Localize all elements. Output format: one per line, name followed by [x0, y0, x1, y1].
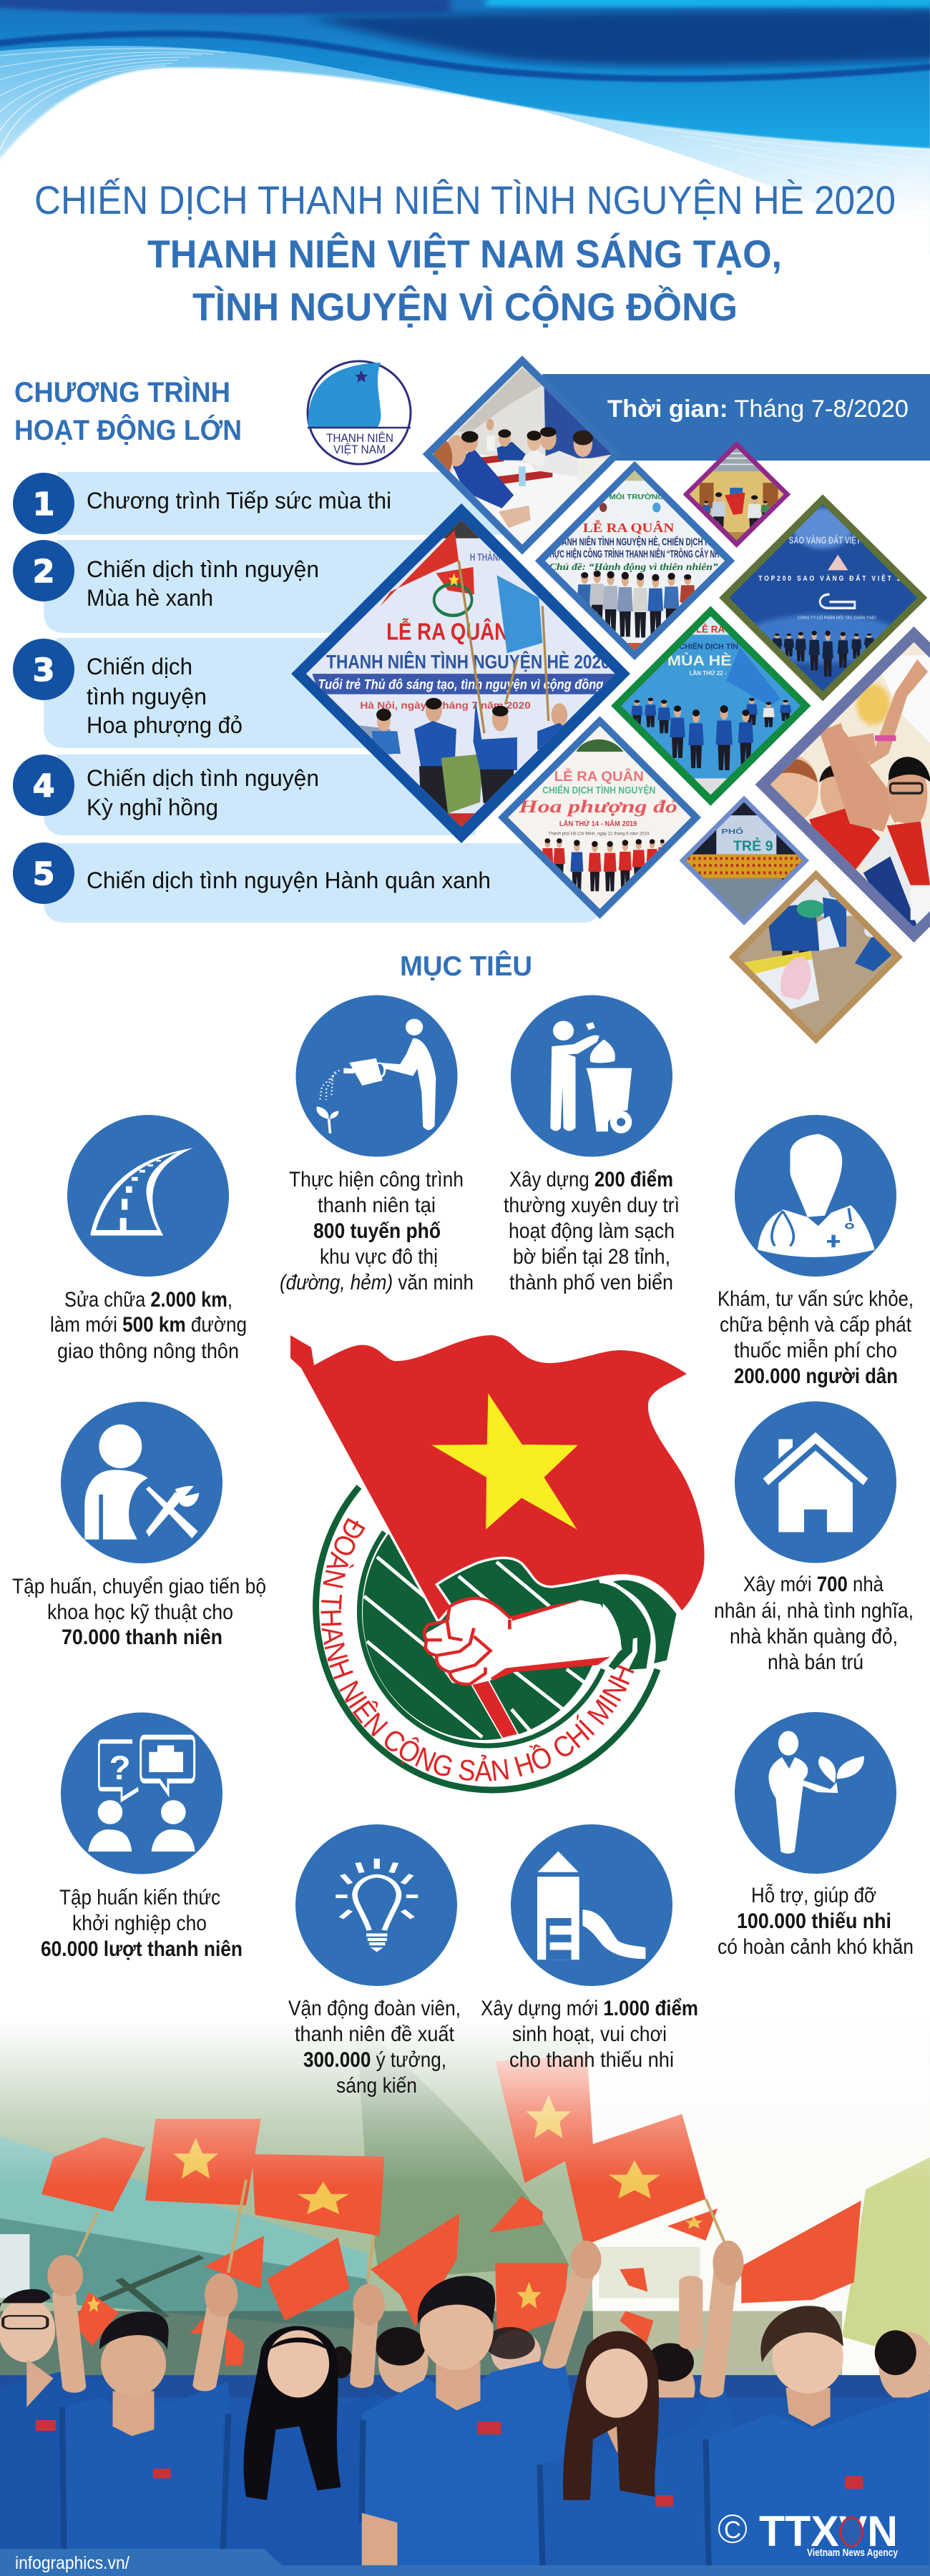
text: sinh hoạt, vui chơi [512, 2022, 667, 2046]
text: Xây dựng mới 1.000 điểm [481, 1997, 698, 2020]
text: thanh niên tại [318, 1194, 436, 1217]
row 3: tình nguyện [87, 684, 207, 709]
text [50, 1288, 247, 1363]
icon: doctor [758, 1134, 875, 1257]
text: Hỗ trợ, giúp đỡ [751, 1884, 876, 1907]
background: blue wave header [0, 0, 930, 255]
icon: Thanh nien Viet Nam logo: VIỆT NAM [333, 443, 386, 456]
row 1 [13, 472, 522, 535]
flags [41, 2055, 861, 2366]
hand and sleeve [424, 1580, 676, 1738]
objective: bins [504, 996, 680, 1294]
heading: programme: CHƯƠNG TRÌNH [14, 376, 230, 408]
photo: main, Le ra quan: Tuổi trẻ Thủ đô sáng tạo, tình nguyện vì cộng đồng [318, 677, 603, 692]
agency logo: TTXVN: C [724, 2517, 741, 2544]
photo: environment launch [535, 461, 735, 660]
photo: main, Le ra quan: LỄ RA QUÂN [386, 617, 509, 645]
raised arms [64, 2263, 727, 2391]
heading: programme: HOẠT ĐỘNG LỚN [14, 413, 242, 446]
icon: person watering plant [316, 1019, 436, 1134]
icon: man holding a plant [768, 1731, 864, 1854]
photo: Top 200 Sao Vang Dat Viet: TOP200 SAO VÀNG ĐẤT VIỆT 2 [758, 574, 901, 583]
row 5 [13, 842, 601, 923]
text: Thực hiện công trình [289, 1168, 464, 1191]
icon: two people talking [88, 1737, 195, 1852]
agency logo: TTXVN: TTXVN [759, 2507, 898, 2555]
objective: ideas [288, 1824, 461, 2098]
row 2: 2 [33, 554, 54, 590]
emblem: Doan TNCS Ho Chi Minh [290, 1335, 705, 1794]
text: 800 tuyến phố [313, 1219, 441, 1243]
text [12, 1575, 266, 1649]
icon: house [763, 1432, 868, 1532]
text: thường xuyên duy trì [504, 1194, 680, 1217]
text [718, 1884, 914, 1959]
icon: Thanh nien Viet Nam logo [308, 361, 411, 464]
row 2: Chiến dịch tình nguyện [87, 556, 319, 582]
text: làm mới 500 km đường [50, 1313, 247, 1337]
circular text: ĐOÀN THANH NIÊN CỘNG SẢN HỒ CHÍ MINH [320, 1518, 634, 1781]
footer: source bar: infographics.vn/ [15, 2553, 129, 2573]
icon: light bulb [336, 1859, 418, 1952]
objective: houses [714, 1402, 914, 1674]
objective: playgrounds [481, 1824, 698, 2072]
row 3: Chiến dịch [87, 654, 192, 679]
back row [0, 2375, 930, 2414]
text: hoạt động làm sạch [509, 1219, 675, 1243]
photo: Hoa phuong do [498, 716, 701, 919]
photo: Hoa phuong do: Hoa phượng đỏ [518, 797, 677, 817]
text: 60.000 lượt thanh niên [41, 1937, 243, 1961]
text: Xây dựng 200 điểm [509, 1168, 673, 1191]
photo: environment launch: THANH NIÊN TÌNH NGUYỆN HÈ, CHIẾN DỊCH KỲ [552, 536, 715, 548]
text: Vận động đoàn viên, [288, 1997, 461, 2020]
heading: objectives: MỤC TIÊU [400, 950, 532, 982]
footer: source bar [0, 2549, 930, 2576]
icon: two people talking: ? [109, 1749, 131, 1786]
text: thành phố ven biển [509, 1271, 673, 1294]
row 4: Chiến dịch tình nguyện [87, 765, 319, 791]
text: khu vực đô thị [320, 1245, 438, 1269]
text [718, 1287, 914, 1388]
photo: main, Le ra quan: Hà Nội, ngày 1 tháng 7 năm 2020 [360, 700, 531, 711]
photo: Mua he xanh: CHIẾN DỊCH TÌN [679, 641, 738, 652]
photo: main, Le ra quan: H THÀNH [470, 551, 504, 563]
text: khởi nghiệp cho [72, 1912, 207, 1935]
panel: programme list [13, 472, 601, 923]
text: Tập huấn, chuyển giao tiến bộ [12, 1575, 266, 1598]
text [41, 1886, 243, 1961]
text [280, 1168, 474, 1294]
row 3: Hoa phượng đỏ [87, 712, 243, 738]
row 5: Chiến dịch tình nguyện Hành quân xanh [87, 867, 491, 893]
text [714, 1573, 914, 1674]
text: 300.000 ý tưởng, [303, 2048, 446, 2072]
faces and hair [0, 2276, 843, 2500]
icon: road [91, 1148, 193, 1236]
photo: festival stage: TRẺ 9 [733, 837, 773, 855]
objective: technical training [12, 1402, 266, 1649]
photo: environment launch: Chủ đề: “Hành động vì thiên nhiên” [549, 561, 719, 572]
row 3: 3 [33, 652, 54, 689]
photo: Hoa phuong do: LỄ RA QUÂN [554, 767, 644, 784]
text: 100.000 thiếu nhi [737, 1909, 891, 1933]
text: khoa học kỹ thuật cho [47, 1601, 233, 1624]
text: cho thanh thiếu nhi [509, 2048, 674, 2072]
agency logo: TTXVN: Vietnam News Agency [807, 2547, 899, 2559]
photo: festival stage: PHỐ [721, 827, 743, 836]
row 2 [13, 540, 476, 633]
row 4: Kỳ nghỉ hồng [87, 795, 218, 820]
text: thanh niên đề xuất [295, 2022, 455, 2046]
objective: support for children [718, 1712, 914, 1959]
photo: environment launch: LỄ RA QUÂN [583, 521, 674, 535]
photo: Top 200 Sao Vang Dat Viet: SAO VÀNG ĐẤT VIỆT [789, 534, 861, 546]
text: (đường, hẻm) văn minh [280, 1271, 474, 1294]
text: Xây mới 700 nhà [743, 1573, 884, 1596]
photo: house handover [683, 441, 790, 548]
text: bờ biển tại 28 tỉnh, [513, 1245, 670, 1269]
photo: Mua he xanh: LẦN THỨ 22 - [690, 669, 727, 677]
photo: main, Le ra quan: THANH NIÊN TÌNH NGUYỆN HÈ 2020 [326, 652, 610, 673]
photo band: young volunteers with flags [0, 2020, 930, 2567]
title: TÌNH NGUYỆN VÌ CỘNG ĐỒNG [192, 285, 738, 329]
text [481, 1997, 698, 2072]
photo: environment launch: MÔI TRƯỜNG [609, 492, 664, 501]
photo: Mua he xanh [611, 606, 811, 806]
title [34, 177, 896, 329]
icon: person with tools [84, 1425, 199, 1540]
text [288, 1997, 461, 2098]
row 5: 5 [33, 856, 54, 893]
text: Tập huấn kiến thức [59, 1886, 220, 1909]
banner: time: Thời gian: Tháng 7-8/2020 [607, 395, 909, 423]
photo: festival stage [679, 796, 809, 925]
photo: environment launch: THỰC HIỆN CÔNG TRÌNH THANH NIÊN “TRỒNG CÂY NHỚ [546, 549, 725, 560]
title: THANH NIÊN VIỆT NAM SÁNG TẠO, [147, 232, 782, 276]
text: 70.000 thanh niên [62, 1626, 222, 1649]
banner: time [542, 374, 930, 461]
flag [290, 1335, 705, 1620]
photo: main, Le ra quan [291, 503, 630, 844]
objective: watering [280, 996, 474, 1294]
text: 200.000 người dân [734, 1365, 898, 1388]
icon: Thanh nien Viet Nam logo: THANH NIÊN [326, 431, 393, 445]
row 3 [13, 638, 429, 748]
photo: Hoa phuong do: Thành phố Hồ Chí Minh, ngày 21 tháng 6 năm 2019 [549, 832, 649, 837]
text [504, 1168, 680, 1294]
photo: Mua he xanh: MÙA HÈ [667, 652, 732, 669]
photo: Top 200 Sao Vang Dat Viet: CÔNG TY CỔ PHẦN ĐỐI TÁC CHÂN THẬT [798, 615, 877, 621]
row 4 [13, 754, 476, 835]
heading: programme [14, 376, 242, 446]
text: thuốc miễn phí cho [734, 1339, 897, 1362]
text: sáng kiến [336, 2074, 417, 2098]
photo: Hoa phuong do: CHIẾN DỊCH TÌNH NGUYỆN [542, 785, 655, 796]
photo: Mua he xanh: LỄ RA [696, 624, 725, 635]
photo: cheering crowd [755, 626, 930, 943]
icon: playground slide [537, 1851, 645, 1960]
objective: start-up training [41, 1712, 243, 1961]
photo: Hoa phuong do: LẦN THỨ 14 - NĂM 2019 [559, 819, 637, 828]
row 2: Mùa hè xanh [87, 585, 213, 611]
text: nhà bán trú [768, 1651, 863, 1674]
shirts [112, 2397, 930, 2565]
icon: person with trash bin [550, 1021, 632, 1134]
text: nhà khăn quàng đỏ, [730, 1625, 898, 1648]
text: giao thông nông thôn [57, 1339, 239, 1363]
photo: meeting at table [421, 355, 624, 556]
photo: beach clean-up [729, 870, 903, 1044]
row 1: 1 [33, 486, 54, 523]
row 4: 4 [33, 768, 54, 805]
objective: health [718, 1115, 914, 1388]
photo: Top 200 Sao Vang Dat Viet [719, 494, 927, 702]
row 1: Chương trình Tiếp sức mùa thi [87, 488, 391, 513]
objective: roads [50, 1115, 247, 1363]
badges [36, 2420, 863, 2507]
photo collage [291, 355, 930, 1044]
text: Sửa chữa 2.000 km, [64, 1288, 232, 1312]
